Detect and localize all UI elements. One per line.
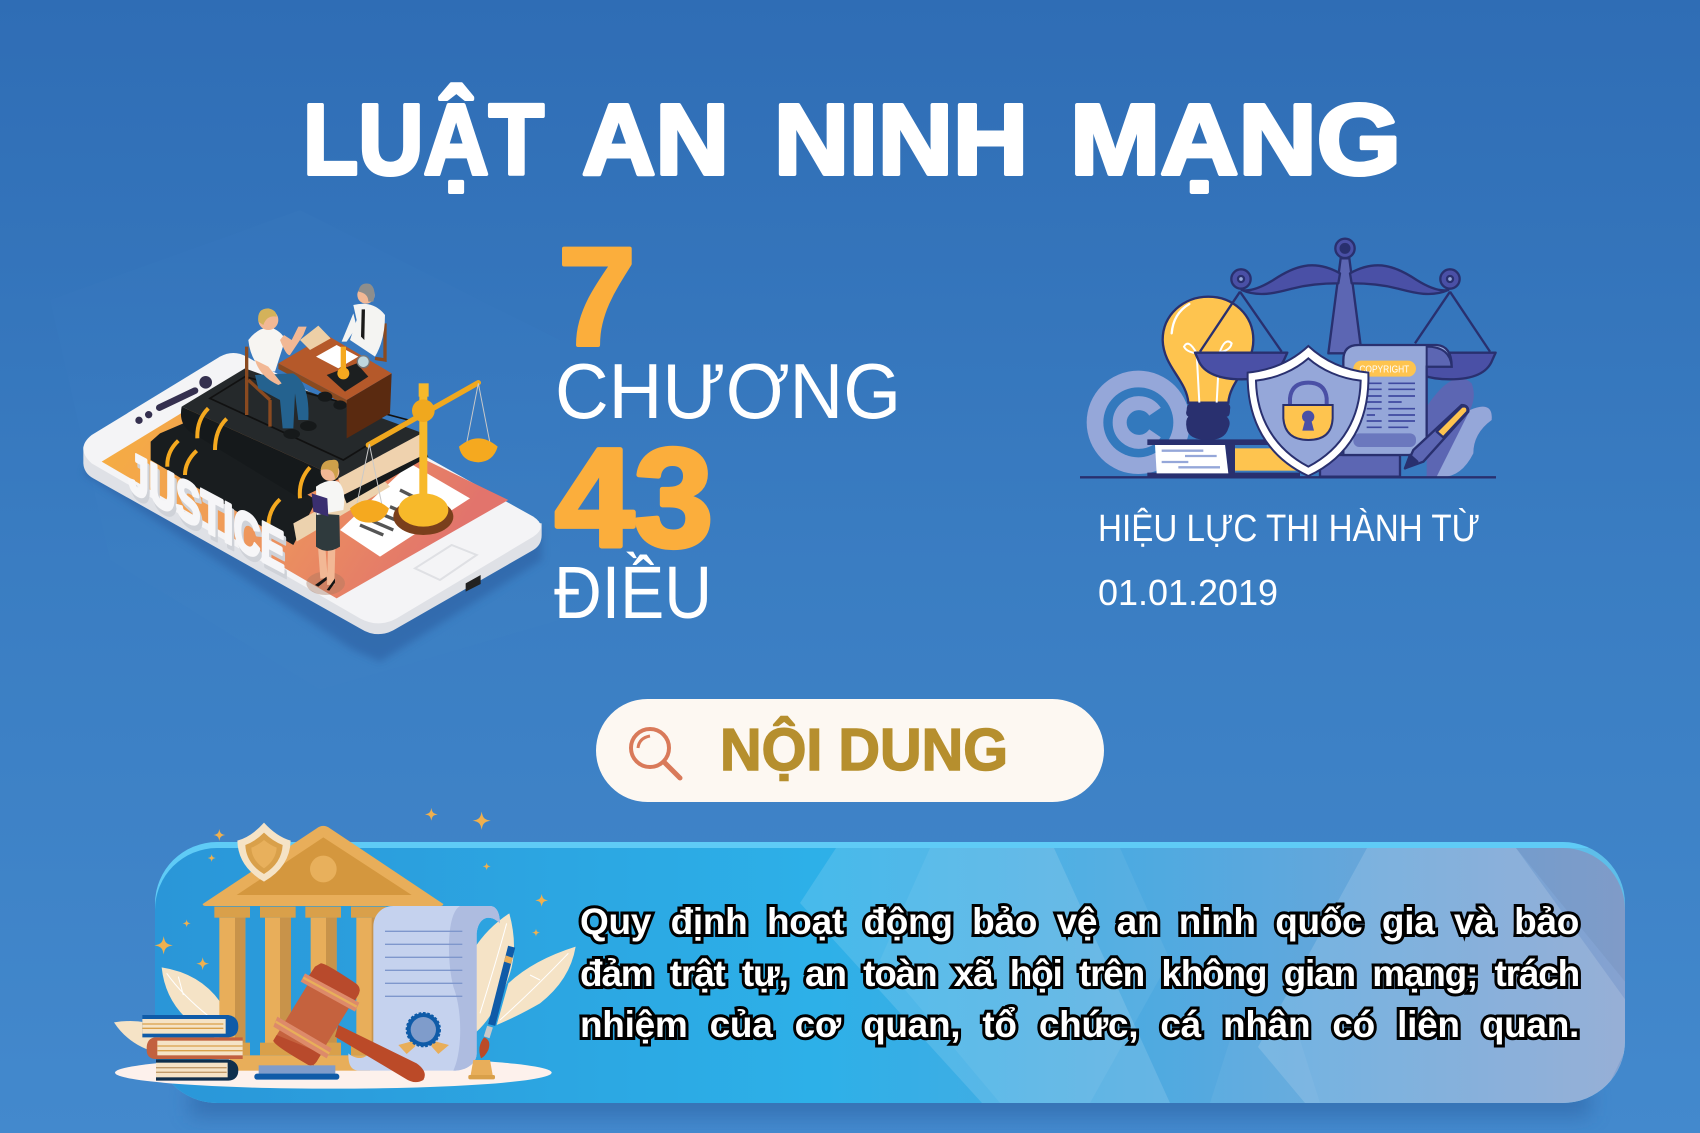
sparkles (154, 808, 548, 970)
summary paragraph (578, 901, 1581, 1048)
summary paragraph: nhiệm của cơ quan, tổ chức, cá nhân có liên quan. (580, 1004, 1579, 1045)
JUSTICE 3D letters: JUSTICE (131, 444, 287, 591)
scroll (348, 906, 500, 1071)
title: NINH (774, 84, 1028, 196)
blob behind pen (1427, 378, 1492, 477)
search pill: contents heading (596, 699, 1104, 802)
scale frame (1231, 239, 1460, 353)
title: MẠNG (1070, 84, 1401, 196)
search pill: contents heading: NỘI DUNG (720, 716, 1008, 783)
stat: 43 articles: ĐIỀU (554, 551, 712, 634)
stat: 7 chapters (555, 218, 901, 435)
effective date text: 01.01.2019 (1098, 572, 1278, 613)
light bulb (1163, 297, 1253, 440)
phone shadow (83, 460, 542, 662)
JUSTICE 3D letters (128, 438, 287, 591)
title: LUẬT (303, 84, 544, 196)
desk (278, 326, 392, 438)
person: woman with folder (306, 460, 345, 595)
gold balance scale (350, 383, 498, 535)
book (1147, 439, 1300, 477)
panel: summary (155, 842, 1640, 1116)
person: lawyer (318, 284, 385, 410)
stat: 7 chapters: 7 (558, 218, 636, 375)
effective date text: HIỆU LỰC THI HÀNH TỪ (1098, 507, 1480, 550)
summary paragraph: Quy định hoạt động bảo vệ an ninh quốc gia và bảo (580, 901, 1579, 942)
copyright document (1320, 345, 1452, 477)
person: client (247, 308, 317, 439)
summary paragraph: đảm trật tự, an toàn xã hội trên không gian mạng; trách (580, 952, 1579, 994)
ground line (1080, 474, 1496, 481)
ground ellipse (115, 1057, 552, 1089)
icon: magnifier (631, 729, 680, 778)
courthouse (203, 826, 443, 1080)
copyright symbol (1087, 371, 1190, 474)
gavel (273, 963, 425, 1082)
documents under scale (340, 463, 470, 557)
illustration: phone with books and justice scene (83, 284, 542, 662)
title (303, 84, 1401, 196)
copyright document: COPYRIGHT (1359, 365, 1410, 376)
paint brush pen (468, 947, 512, 1079)
stat: 7 chapters: CHƯƠNG (555, 347, 901, 435)
pen (1405, 405, 1468, 468)
shield with padlock (1248, 346, 1368, 476)
stacked books (142, 1015, 243, 1081)
stacked books (151, 368, 428, 545)
shield badge (237, 823, 291, 882)
stat: 43 articles: 43 (555, 419, 713, 576)
title: AN (582, 84, 729, 196)
JUSTICE 3D letters: JUSTICE (128, 438, 285, 585)
leaves (114, 913, 576, 1053)
scale strings and pans (1195, 292, 1496, 379)
phone body (83, 353, 542, 634)
illustration: courthouse, gavel and scroll (114, 808, 576, 1089)
effective date text (1098, 507, 1480, 613)
illustration: scales, bulb, shield and copyright (1080, 239, 1496, 477)
